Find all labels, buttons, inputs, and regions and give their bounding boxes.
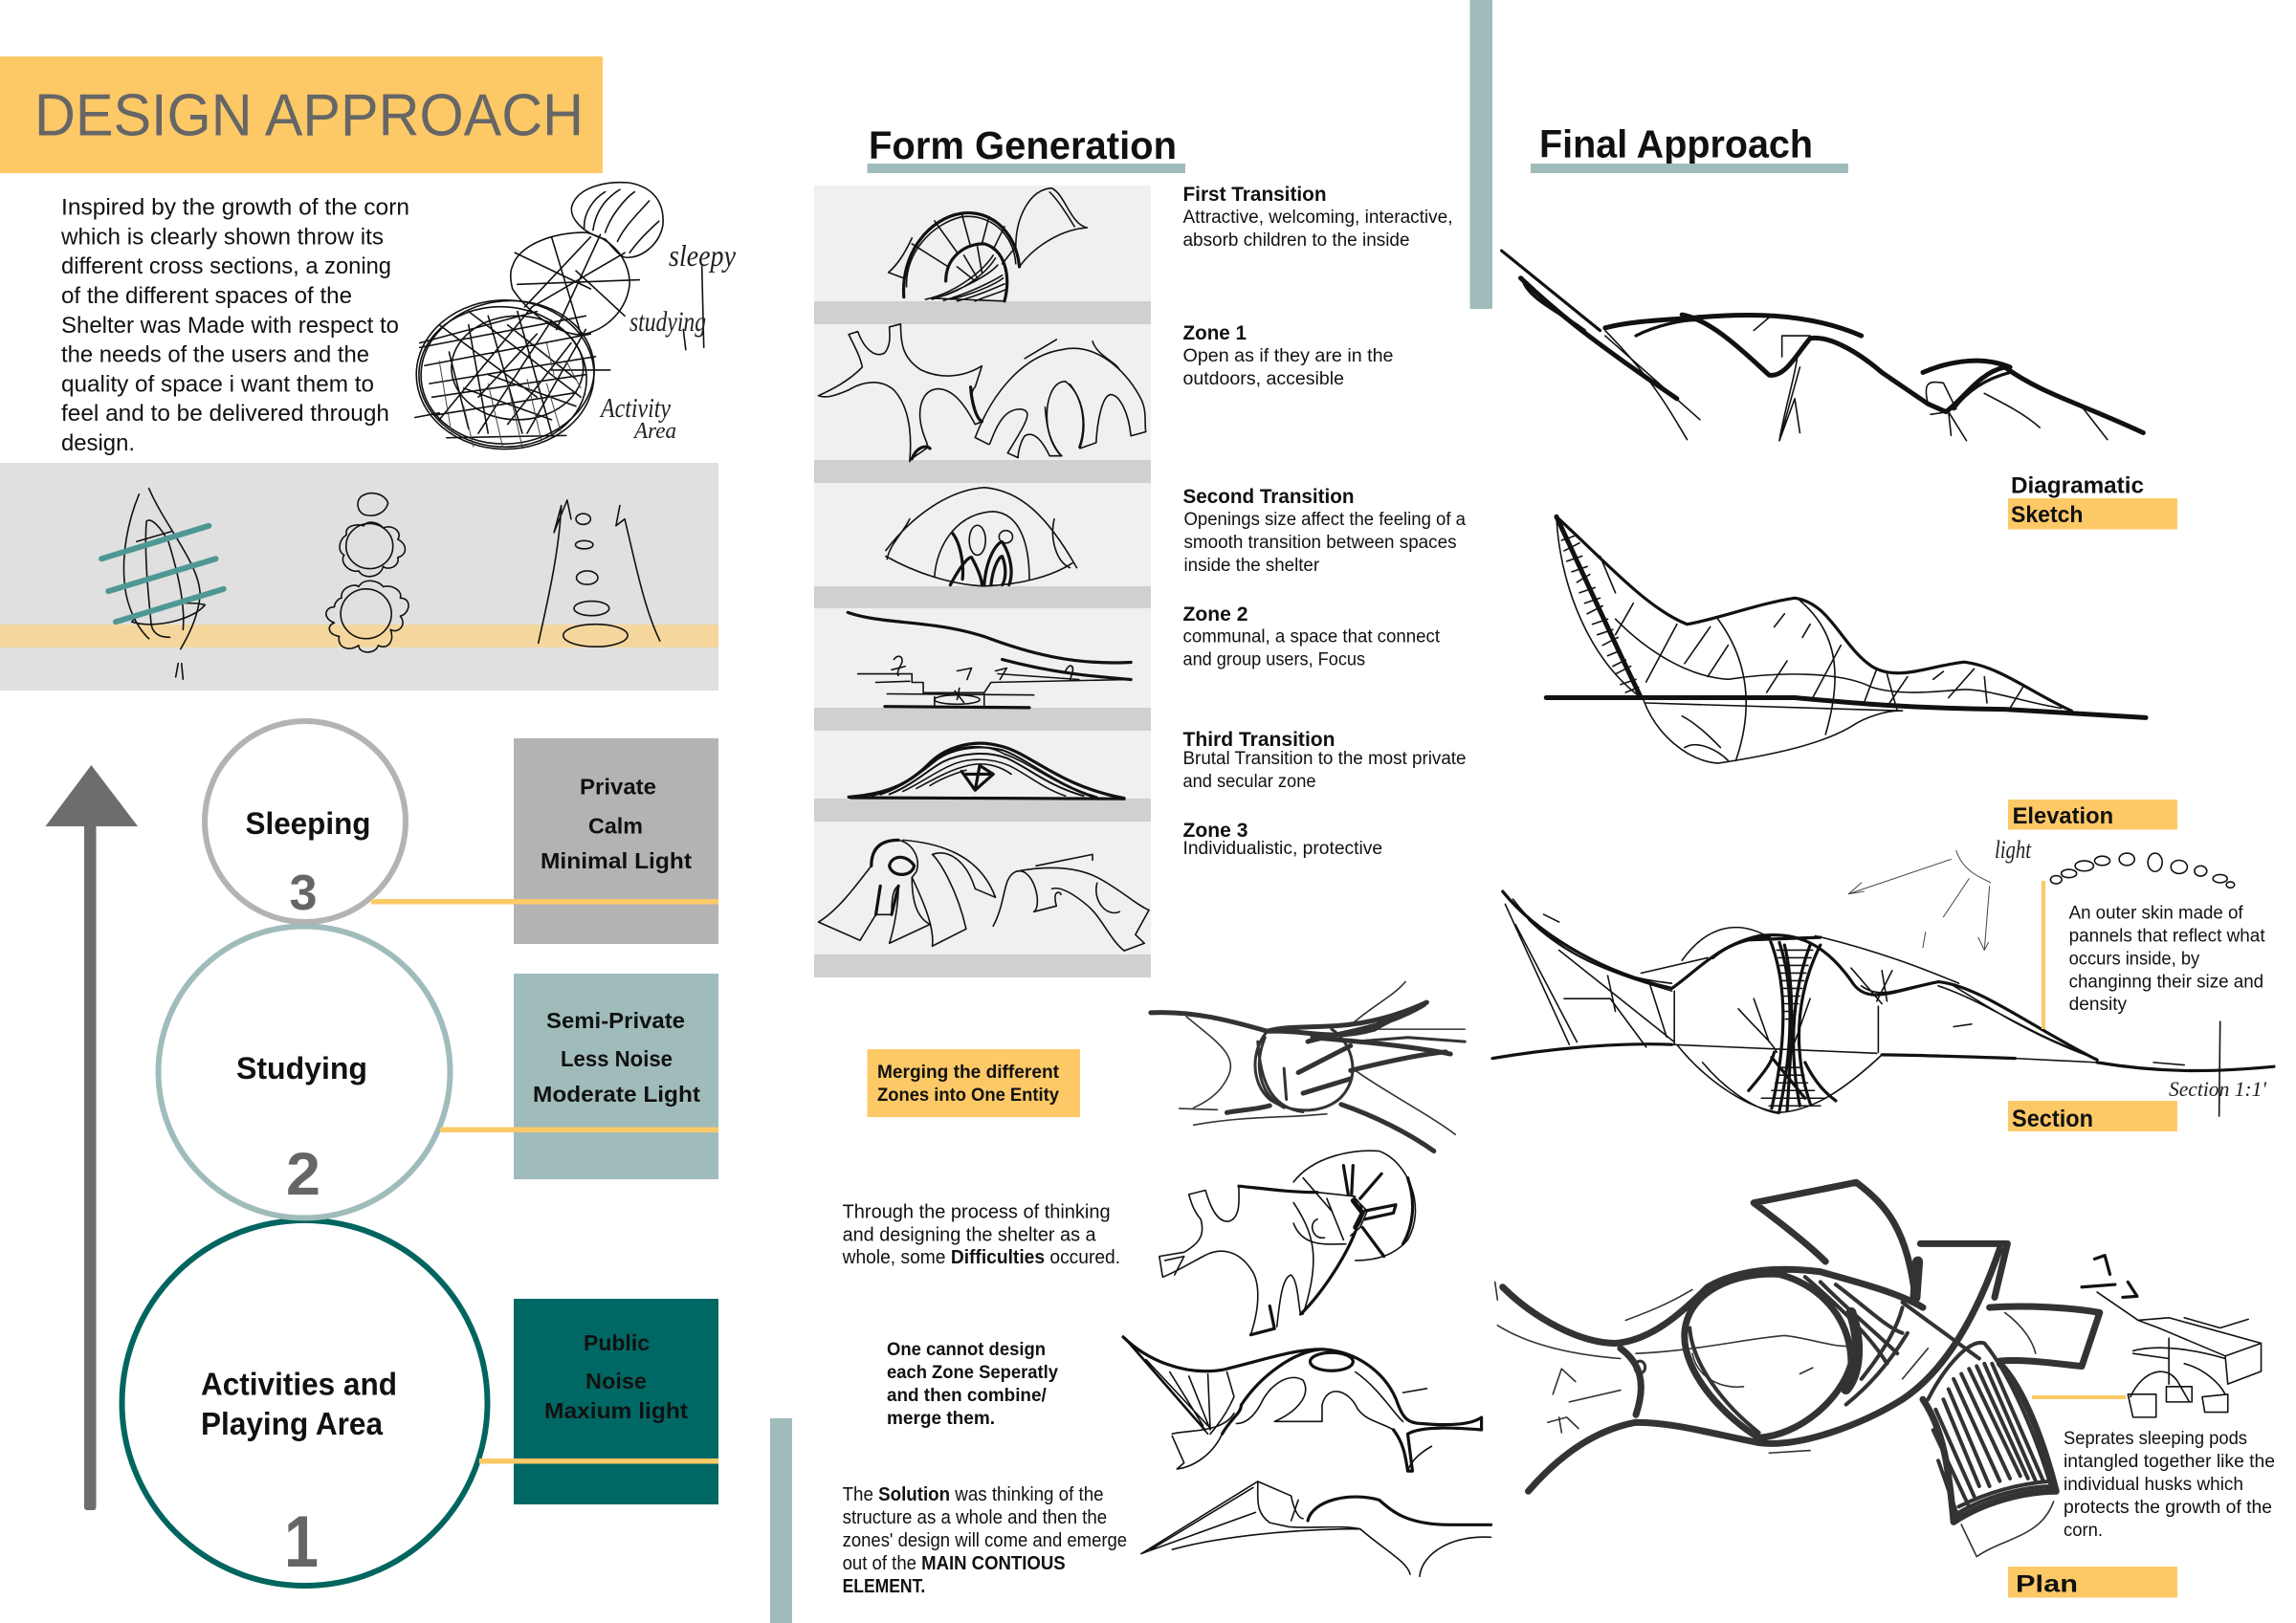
zone circle: studying: 2 [286, 1141, 320, 1208]
sketch: merged plan 4 [1141, 1481, 1491, 1576]
notes: transitions and zones [1182, 184, 1466, 859]
sketch: corn section with openings [539, 500, 660, 647]
teal bar bottom [770, 1418, 792, 1623]
text: cannot design separately: and then combine/ [887, 1385, 1047, 1406]
note: sleeping pods: intangled together like the [2064, 1451, 2275, 1472]
label: diagramatic sketch [2008, 473, 2177, 530]
note: outer skin: pannels that reflect what [2069, 925, 2265, 946]
handwritten light note: light [1995, 836, 2032, 864]
text: solution: structure as a whole and then the [843, 1507, 1107, 1528]
zone 2 [1182, 603, 1441, 669]
zone circle: activities [122, 1220, 488, 1586]
intro paragraph: the needs of the users and the [61, 342, 369, 368]
sketch: zone 2 [848, 612, 1131, 708]
first transition: Attractive, welcoming, interactive, [1182, 208, 1452, 228]
text: solution: zones' design will come and emerge [843, 1530, 1127, 1551]
box: semi-private: Moderate Light [533, 1082, 700, 1107]
panel: corn cross sections [0, 463, 718, 691]
callout: merging the zones [867, 1049, 1080, 1117]
note: outer skin: changinng their size and [2069, 972, 2263, 993]
text: cannot design separately: merge them. [887, 1408, 995, 1429]
intro paragraph [60, 195, 409, 456]
connector: pods to text [2032, 1395, 2126, 1399]
sketch: elevation [1546, 516, 2146, 763]
text: solution: ELEMENT. [843, 1576, 925, 1597]
zone circle: activities: Playing Area [201, 1406, 384, 1441]
second transition: inside the shelter [1184, 556, 1320, 576]
zone circle: activities: Activities and [201, 1366, 397, 1402]
intro paragraph: Shelter was Made with respect to [61, 313, 399, 339]
zone circle: studying: Studying [236, 1051, 367, 1086]
sketch: zone 1 [819, 324, 1146, 462]
box: private: Private [580, 775, 656, 800]
sketch: section marker and pods [2082, 1256, 2262, 1417]
third transition: Brutal Transition to the most private [1182, 749, 1466, 769]
sketch: zone 3 [819, 840, 1149, 951]
zone circle: sleeping: 3 [289, 866, 318, 921]
note: sleeping pods: corn. [2064, 1520, 2103, 1541]
box: public: Maxium light [544, 1398, 688, 1423]
zone circle: studying [159, 926, 450, 1218]
sketch: panel bubbles [2050, 853, 2235, 888]
text: solution [843, 1484, 1127, 1597]
note: outer skin: An outer skin made of [2069, 902, 2243, 923]
note: sleeping pods: Seprates sleeping pods [2064, 1428, 2247, 1449]
note: sleeping pods: individual husks which [2064, 1474, 2243, 1495]
intro paragraph: design. [61, 430, 135, 456]
heading: Form Generation: Form Generation [869, 123, 1177, 167]
text: cannot design separately [887, 1339, 1058, 1429]
first transition: First Transition [1182, 184, 1326, 206]
sketch: light rays [1848, 850, 1991, 950]
text: solution: The Solution was thinking of the [843, 1484, 1104, 1505]
soil band [0, 625, 718, 647]
note: sleeping pods [2064, 1428, 2275, 1541]
first transition [1182, 184, 1452, 251]
first transition: absorb children to the inside [1182, 230, 1410, 251]
sketch: third transition [849, 743, 1124, 799]
note: sleeping pods: protects the growth of the [2064, 1497, 2272, 1518]
box: private: Minimal Light [541, 848, 692, 873]
text: cannot design separately: One cannot design [887, 1339, 1046, 1360]
zone circle: activities: 1 [284, 1502, 319, 1583]
second transition: smooth transition between spaces [1184, 533, 1456, 553]
sketch: zoning bubbles: studying [629, 306, 706, 338]
intro paragraph: Inspired by the growth of the corn [61, 195, 409, 221]
callout: merging the zones: Zones into One Entity [877, 1085, 1059, 1106]
sketch: section [1492, 891, 2274, 1116]
label: diagramatic sketch: Diagramatic [2011, 473, 2144, 499]
sketch: merged plan 1 [1151, 981, 1465, 1151]
sketch: diagrammatic [1502, 251, 2143, 441]
sketch: merged plan 3 [1123, 1337, 1482, 1471]
third transition: Third Transition [1182, 729, 1336, 751]
note: outer skin: density [2069, 994, 2127, 1015]
second transition: Openings size affect the feeling of a [1184, 510, 1466, 530]
box: private [371, 738, 718, 944]
sketch: plan [1495, 1182, 2100, 1557]
second transition [1182, 486, 1466, 576]
sketch: first transition [889, 188, 1087, 301]
text: difficulties: and designing the shelter as a [843, 1225, 1096, 1246]
text: cannot design separately: each Zone Seperatly [887, 1362, 1058, 1383]
sketch: corn cob with teal lines [101, 489, 224, 679]
zone 3: Zone 3 [1182, 820, 1247, 842]
label: section: Section [2012, 1106, 2093, 1132]
arrow: upward progression [46, 765, 138, 1510]
sketch: second transition [886, 488, 1076, 586]
text: solution: out of the MAIN CONTIOUS [843, 1553, 1066, 1574]
label: plan: Plan [2016, 1571, 2078, 1598]
box: semi-private: Less Noise [561, 1046, 673, 1071]
sketch: zoning bubbles: Area [632, 419, 676, 444]
note: outer skin [2042, 881, 2265, 1029]
title banner: Design Approach [0, 56, 603, 173]
sketch: stacked flower forms [326, 493, 408, 652]
third transition [1182, 729, 1466, 792]
box: public [479, 1299, 718, 1504]
third transition: and secular zone [1182, 772, 1316, 792]
label: plan [2008, 1567, 2177, 1598]
sketch: zoning bubbles [408, 183, 737, 457]
intro paragraph: of the different spaces of the [61, 283, 352, 309]
zone circle: sleeping [205, 721, 406, 922]
zone 3 [1182, 820, 1382, 859]
label: elevation: Elevation [2013, 803, 2113, 829]
intro paragraph: quality of space i want them to [61, 371, 374, 397]
box: public: Noise [585, 1369, 647, 1393]
panel stack: form sketches [814, 186, 1151, 977]
zone 1: Open as if they are in the [1182, 346, 1393, 366]
label: section [2008, 1101, 2177, 1132]
teal bar top [1469, 0, 1492, 309]
zone 3: Individualistic, protective [1182, 839, 1382, 859]
zone 1: outdoors, accesible [1182, 369, 1344, 389]
second transition: Second Transition [1182, 486, 1355, 508]
callout: merging the zones: Merging the different [877, 1062, 1059, 1083]
sketch: zoning bubbles: Activity [599, 394, 671, 424]
title banner: Design Approach: DESIGN APPROACH [34, 82, 584, 149]
heading: Final Approach: Final Approach [1539, 122, 1813, 166]
zone 2: Zone 2 [1182, 603, 1247, 625]
note: outer skin: occurs inside, by [2069, 948, 2199, 969]
sketch: merged plan 2 [1159, 1151, 1415, 1335]
text: difficulties [842, 1201, 1120, 1268]
intro paragraph: different cross sections, a zoning [61, 253, 391, 279]
intro paragraph: which is clearly shown throw its [60, 224, 384, 250]
label: elevation [2008, 800, 2177, 830]
sketch: zoning bubbles: sleepy [669, 238, 737, 273]
zone 2: communal, a space that connect [1182, 627, 1441, 647]
box: private: Calm [588, 813, 643, 838]
handwritten scale note: Section 1:1' [2169, 1077, 2266, 1101]
box: semi-private: Semi-Private [546, 1008, 685, 1033]
box: semi-private [440, 974, 718, 1179]
label: diagramatic sketch: Sketch [2011, 502, 2084, 528]
intro paragraph: feel and to be delivered through [61, 401, 389, 427]
text: difficulties: Through the process of thinking [843, 1201, 1111, 1222]
zone 2: and group users, Focus [1182, 650, 1365, 669]
zone 1 [1182, 322, 1393, 389]
box: public: Public [584, 1330, 650, 1355]
zone circle: sleeping: Sleeping [245, 806, 371, 841]
text: difficulties: whole, some Difficulties occured. [842, 1247, 1120, 1268]
zone 1: Zone 1 [1182, 322, 1247, 344]
